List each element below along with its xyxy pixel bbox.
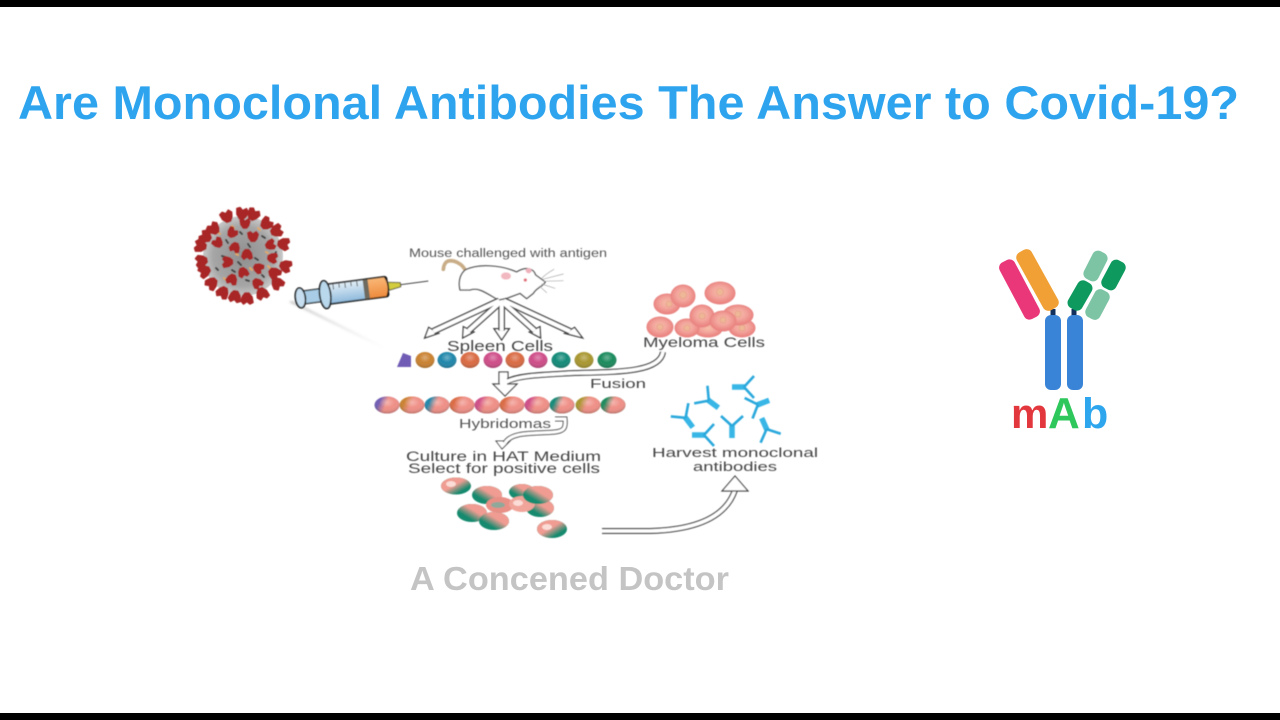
antibody heavy-chain arms [997,247,1061,322]
icon: mouse [443,261,563,300]
label: hybridomas: Hybridomas [459,416,552,431]
bottom black bar [0,713,1280,720]
label: harvest monoclonal antibodies: antibodies [693,459,778,474]
watermark: author name: A Concened Doctor [410,560,729,597]
label: myeloma cells: Myeloma Cells [643,334,765,350]
antibodies group [671,376,781,446]
hybrid cells row [374,396,626,414]
spleen cells row [397,352,616,368]
antibody hinges [1053,309,1074,318]
arrow: hybridomas to culture [496,419,565,449]
label: harvest monoclonal antibodies: Harvest monoclonal [652,445,818,460]
arrow: fusion [493,352,663,396]
label: select for positive cells: Select for positive cells [408,461,600,476]
arrows: mouse to spleen cells [425,301,583,340]
label: mAb: b [1082,390,1108,438]
antibody stem [1045,315,1083,390]
diagram: hybridoma process [374,248,818,538]
antibody light-chain arms [1065,249,1128,322]
myeloma cells [647,282,755,337]
label: mAb: A [1048,389,1080,438]
title: Are Monoclonal Antibodies The Answer to Covid-19? [18,76,1239,129]
top black bar [0,0,1280,7]
arrow: cells to harvest [602,476,748,531]
label: fusion: Fusion [590,377,646,391]
icon: antibody logo [997,247,1128,390]
icon: syringe [294,267,430,312]
label: harvest monoclonal antibodies [652,445,818,474]
selected positive cells [441,478,567,538]
label: spleen cells: Spleen Cells [447,339,553,355]
label: culture in HAT medium: Culture in HAT Medium [406,449,601,464]
syringe shadow [289,301,385,347]
label: mouse challenged: Mouse challenged with antigen [409,248,607,260]
icon: coronavirus [194,207,293,304]
label: mAb: m [1011,390,1048,437]
